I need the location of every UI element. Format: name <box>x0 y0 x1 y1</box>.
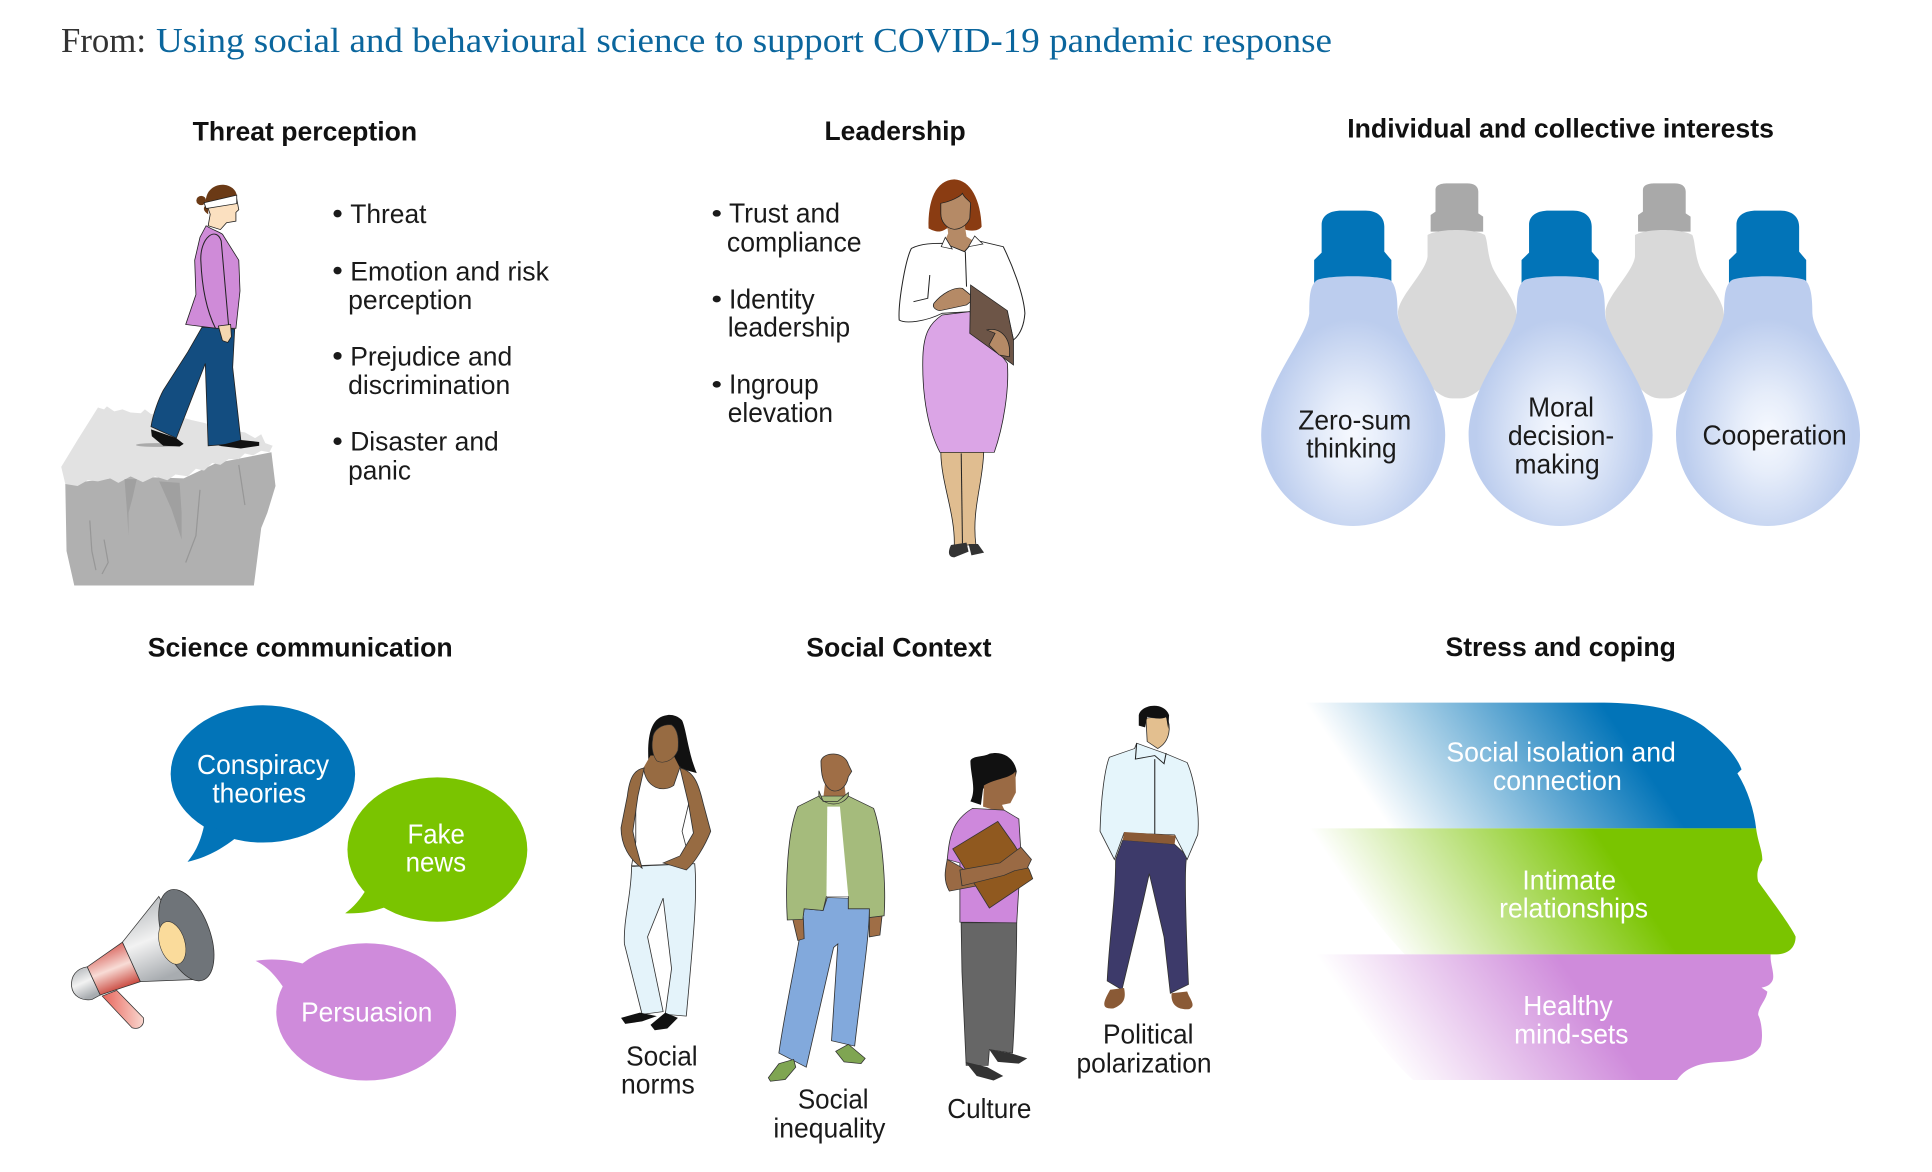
title: From: <box>61 21 146 60</box>
panel: threat perception <box>61 116 550 585</box>
icon: megaphone <box>71 883 225 1028</box>
figure: culture: Culture <box>947 1095 1031 1125</box>
bullet list: leadership: Ingroup <box>729 369 819 400</box>
head band: intimate relationships: Intimate <box>1522 865 1616 896</box>
icon: bulb zero-sum thinking: thinking <box>1306 433 1397 463</box>
figure: political polarization <box>1076 706 1212 1079</box>
figure: social norms: norms <box>621 1070 695 1100</box>
icon: bulb zero-sum thinking: Zero-sum <box>1298 405 1411 435</box>
head band: social isolation and connection: connection <box>1493 765 1622 796</box>
icon: bulb moral decision-making: making <box>1514 449 1600 479</box>
bullet list: leadership: compliance <box>727 228 862 258</box>
icon: bulb cooperation <box>1676 211 1860 526</box>
title: Using social and behavioural science to support COVID-19 pandemic response <box>156 21 1332 60</box>
head band: social isolation and connection: Social isolation and <box>1446 737 1676 768</box>
speech bubble: persuasion <box>256 943 456 1081</box>
heading: science communication: Science communication <box>148 632 453 662</box>
speech bubble: fake news: Fake <box>408 820 465 850</box>
heading: stress and coping: Stress and coping <box>1445 633 1676 662</box>
speech bubble: fake news <box>345 777 527 922</box>
bullet list: threat: Prejudice and <box>350 341 512 371</box>
figure: political polarization: polarization <box>1076 1049 1212 1079</box>
panel: science communication <box>71 632 527 1081</box>
figure: social norms: Social <box>626 1042 698 1072</box>
bullet list: threat: Disaster and <box>350 427 499 457</box>
figure: political polarization: Political <box>1103 1020 1193 1050</box>
bullet list: leadership <box>713 199 862 428</box>
speech bubble: fake news: news <box>406 848 466 878</box>
figure: social norms <box>621 715 711 1100</box>
panel: individual and collective interests <box>1261 113 1860 526</box>
icon: bulb zero-sum thinking <box>1261 211 1445 526</box>
bullet list: leadership: leadership <box>728 313 850 343</box>
heading: threat perception: Threat perception <box>193 116 417 146</box>
head band: social isolation and connection <box>1305 703 1756 828</box>
figure: social inequality: Social <box>798 1085 869 1115</box>
speech bubble: persuasion: Persuasion <box>301 997 432 1028</box>
figure: social inequality: inequality <box>773 1114 886 1144</box>
icon: grey bulb right <box>1605 183 1724 398</box>
head band: intimate relationships: relationships <box>1499 893 1648 924</box>
illustration: cliff <box>61 406 276 585</box>
icon: bulb cooperation: Cooperation <box>1702 420 1847 450</box>
panel: leadership <box>713 117 1025 557</box>
bullet list: threat: panic <box>348 455 411 485</box>
bullet list: threat: Emotion and risk <box>350 256 550 286</box>
bullet list: threat: Threat <box>350 199 427 229</box>
panel: social context <box>621 633 1212 1144</box>
speech bubble: conspiracy theories: Conspiracy <box>197 750 330 781</box>
icon: bulb moral decision-making: Moral <box>1528 392 1594 423</box>
head band: healthy mind-sets: mind-sets <box>1514 1019 1628 1050</box>
bullet list: leadership: Trust and <box>729 199 840 229</box>
head band: healthy mind-sets: Healthy <box>1523 990 1613 1021</box>
head band: healthy mind-sets <box>1315 954 1773 1080</box>
bullet list: threat: discrimination <box>348 370 510 400</box>
head band: intimate relationships <box>1309 828 1796 954</box>
heading: social context: Social Context <box>806 633 992 663</box>
illustration: woman with folder <box>899 179 1025 557</box>
icon: grey bulb left <box>1398 183 1517 398</box>
panel: stress and coping <box>1305 633 1796 1080</box>
figure: social inequality <box>768 754 886 1144</box>
speech bubble: conspiracy theories: theories <box>212 778 306 809</box>
bullet list: leadership: elevation <box>728 398 833 428</box>
icon: bulb moral decision-making <box>1469 211 1653 526</box>
figure: culture <box>945 753 1033 1125</box>
heading: leadership: Leadership <box>824 117 966 146</box>
bullet list: threat: perception <box>348 285 472 315</box>
icon: bulb moral decision-making: decision- <box>1508 420 1614 451</box>
bullet list: threat <box>333 199 550 485</box>
illustration: blindfolded woman walking <box>136 185 259 448</box>
heading: individual and collective interests: Individual and collective interests <box>1347 113 1774 143</box>
bullet list: leadership: Identity <box>729 284 815 315</box>
speech bubble: conspiracy theories <box>171 705 355 862</box>
